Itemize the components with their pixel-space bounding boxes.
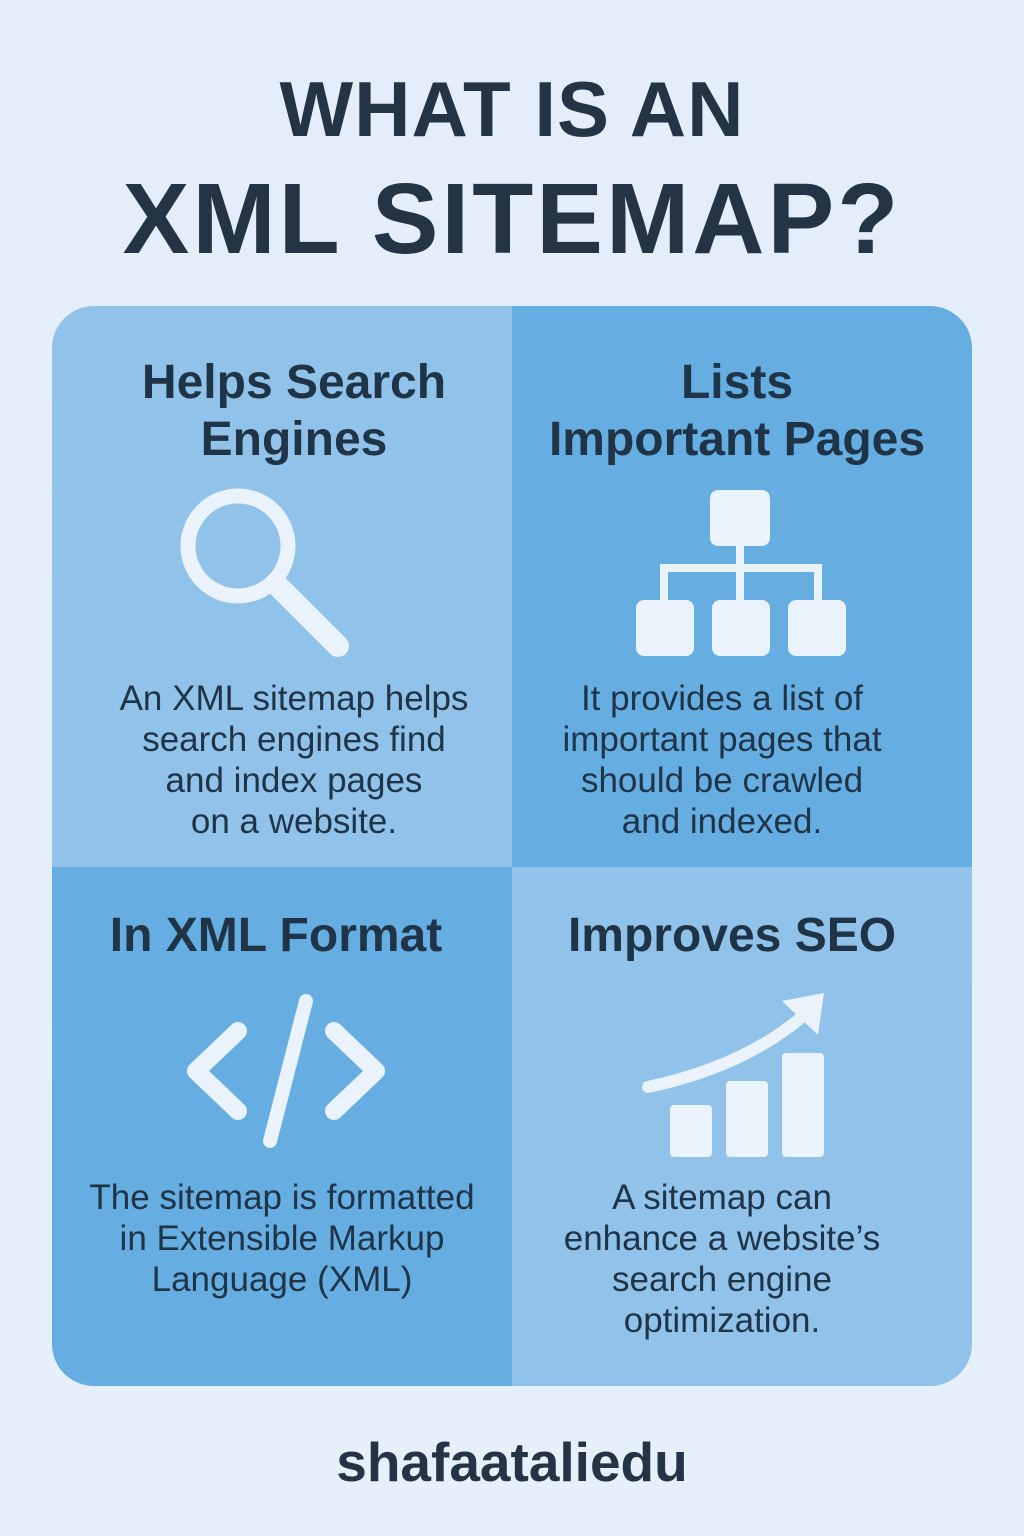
heading (142, 356, 446, 466)
text: in Extensible Markup (120, 1219, 444, 1258)
text: optimization. (624, 1301, 820, 1340)
text (562, 679, 882, 841)
panel: lists important pages (512, 306, 972, 867)
text: important pages that (562, 720, 882, 759)
text: It provides a list of (581, 679, 863, 718)
heading: Engines (201, 413, 387, 466)
text: search engines find (142, 720, 446, 759)
text: search engine (612, 1260, 832, 1299)
text (120, 679, 468, 841)
text (564, 1178, 880, 1340)
text: enhance a website’s (564, 1219, 880, 1258)
text: The sitemap is formatted (89, 1178, 475, 1217)
heading: Improves SEO (568, 909, 896, 962)
heading (549, 356, 925, 466)
text: A sitemap can (612, 1178, 832, 1217)
icon: magnifier (180, 488, 349, 657)
panel: improves seo (512, 867, 972, 1386)
text (89, 1178, 475, 1299)
footer: shafaataliedu (336, 1431, 688, 1493)
text: and indexed. (622, 802, 822, 841)
heading: Helps Search (142, 356, 446, 409)
text: and index pages (166, 761, 422, 800)
grid panels (52, 306, 972, 1386)
text: on a website. (191, 802, 397, 841)
icon: sitemap tree (636, 490, 846, 656)
icon: code brackets (187, 994, 385, 1148)
title: WHAT IS AN (280, 65, 744, 153)
title line 2: XML SITEMAP? (123, 163, 901, 275)
heading: In XML Format (110, 909, 442, 962)
text: An XML sitemap helps (120, 679, 468, 718)
text: Language (XML) (152, 1260, 412, 1299)
panel: helps search engines (52, 306, 512, 867)
icon: growth chart (642, 993, 824, 1157)
panel: xml format (52, 867, 512, 1386)
heading: Important Pages (549, 413, 925, 466)
heading: Lists (681, 356, 793, 409)
text: should be crawled (581, 761, 863, 800)
